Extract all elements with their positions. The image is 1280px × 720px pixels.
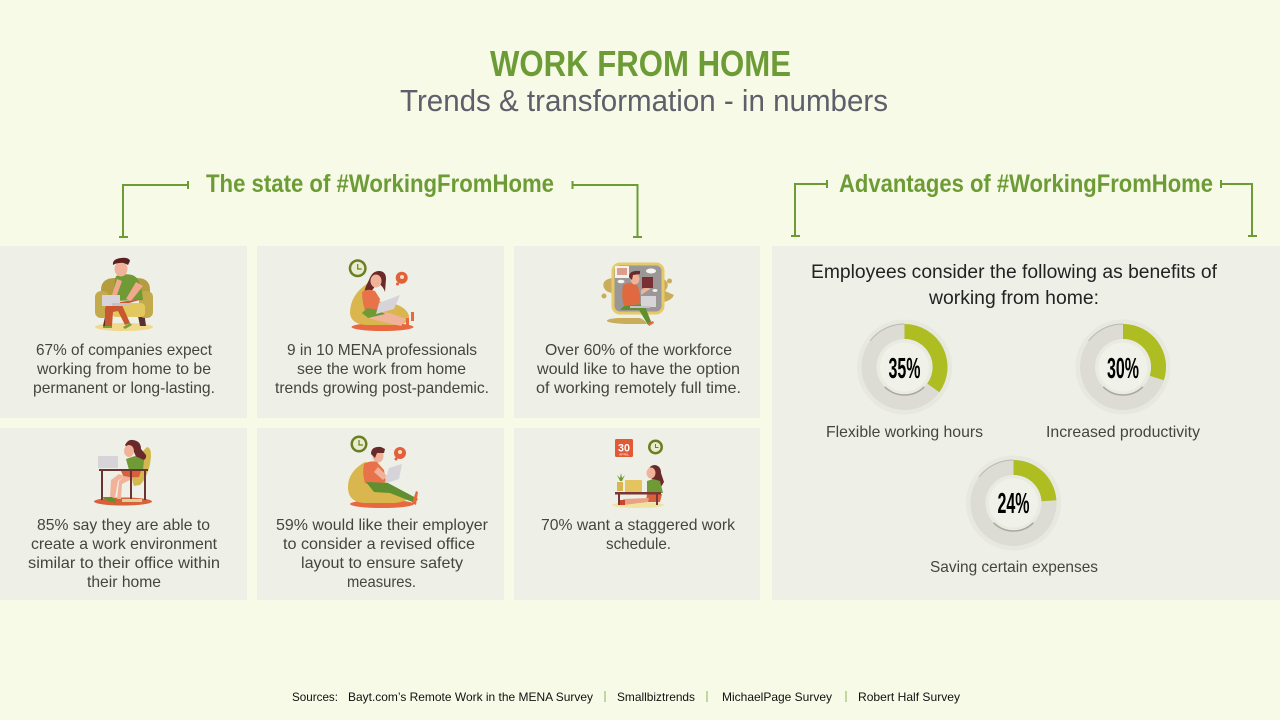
- panel: card 85 percent: [0, 428, 247, 600]
- sources footer: Smallbiztrends: [617, 690, 695, 704]
- text: 70 percent: schedule.: [606, 536, 671, 553]
- donut chart: 24 percent saving certain expenses: 24%: [998, 488, 1030, 520]
- icon: man on beanbag with clock and question mark: [348, 436, 418, 508]
- icon: woman at low table with calendar and clock: [612, 439, 664, 508]
- sources footer: Sources:: [292, 690, 338, 704]
- icon: calendar: APRIL: [619, 452, 629, 456]
- title: [400, 43, 888, 118]
- icon: man on sofa with laptop: [95, 258, 153, 331]
- donut chart: 30 percent increased productivity: [1046, 320, 1200, 441]
- text: 67 percent: permanent or long-lasting.: [33, 380, 215, 397]
- text: 9 in 10: trends growing post-pandemic.: [275, 380, 489, 397]
- icon: calendar: 30: [618, 442, 630, 454]
- heading: advantages of working from home: Advantages of #WorkingFromHome: [839, 170, 1213, 198]
- title: Trends & transformation - in numbers: [400, 83, 888, 118]
- sources footer: Bayt.com’s Remote Work in the MENA Survey: [348, 690, 593, 704]
- text: 70 percent: 70% want a staggered work: [541, 517, 736, 534]
- heading: the state of working from home: [119, 170, 642, 237]
- text: 59 percent: to consider a revised office: [283, 536, 475, 553]
- donut chart: 35 percent flexible working hours: [826, 320, 983, 441]
- panel: benefits of working from home: [772, 246, 1280, 600]
- icon: woman at desk with laptop: [94, 440, 152, 506]
- text: 67 percent: [33, 342, 215, 397]
- text: 85 percent: create a work environment: [31, 536, 218, 553]
- donut chart: 30 percent increased productivity: 30%: [1107, 353, 1139, 385]
- text: 70 percent: [541, 517, 736, 553]
- panel: card over 60 percent: [514, 246, 760, 418]
- donut chart: 24 percent saving certain expenses: [930, 456, 1098, 576]
- donut chart: 35 percent flexible working hours: 35%: [888, 353, 921, 385]
- text: over 60 percent: Over 60% of the workforce: [545, 342, 732, 359]
- sources footer: [292, 690, 960, 704]
- panel heading: Employees consider the following as benefits of: [811, 262, 1218, 283]
- text: 9 in 10: [275, 342, 489, 397]
- text: 59 percent: [276, 517, 489, 591]
- heading: advantages of working from home: [791, 170, 1257, 236]
- icon: calendar: [615, 439, 633, 457]
- text: 85 percent: similar to their office within: [28, 555, 220, 572]
- panel: card 67 percent: [0, 246, 247, 418]
- panel: card 70 percent: [514, 428, 760, 600]
- text: 85 percent: [28, 517, 220, 591]
- panel: card 9 in 10: [257, 246, 504, 418]
- text: 9 in 10: 9 in 10 MENA professionals: [287, 342, 477, 359]
- heading: the state of working from home: The state of #WorkingFromHome: [206, 170, 554, 198]
- panel heading: [811, 262, 1218, 309]
- text: over 60 percent: would like to have the option: [536, 361, 740, 378]
- donut chart: 24 percent saving certain expenses: Saving certain expenses: [930, 559, 1098, 576]
- text: 59 percent: 59% would like their employer: [276, 517, 489, 534]
- title: WORK FROM HOME: [490, 43, 791, 84]
- text: over 60 percent: [536, 342, 741, 397]
- text: 9 in 10: see the work from home: [297, 361, 466, 378]
- text: 59 percent: measures.: [347, 574, 416, 591]
- text: 67 percent: 67% of companies expect: [36, 342, 213, 359]
- text: 85 percent: 85% say they are able to: [37, 517, 210, 534]
- donut chart: 35 percent flexible working hours: Flexible working hours: [826, 424, 983, 441]
- icon: woman on beanbag with clock and question mark: [349, 259, 414, 331]
- text: 85 percent: their home: [87, 574, 161, 591]
- donut chart: 30 percent increased productivity: Increased productivity: [1046, 424, 1200, 441]
- text: 67 percent: working from home to be: [36, 361, 211, 378]
- text: over 60 percent: of working remotely full time.: [536, 380, 741, 397]
- panel: card 59 percent: [257, 428, 504, 600]
- panel heading: working from home:: [928, 288, 1099, 309]
- sources footer: Robert Half Survey: [858, 690, 960, 704]
- sources footer: MichaelPage Survey: [722, 690, 832, 704]
- text: 59 percent: layout to ensure safety: [301, 555, 463, 572]
- icon: man in window frame with book and laptop: [602, 264, 674, 326]
